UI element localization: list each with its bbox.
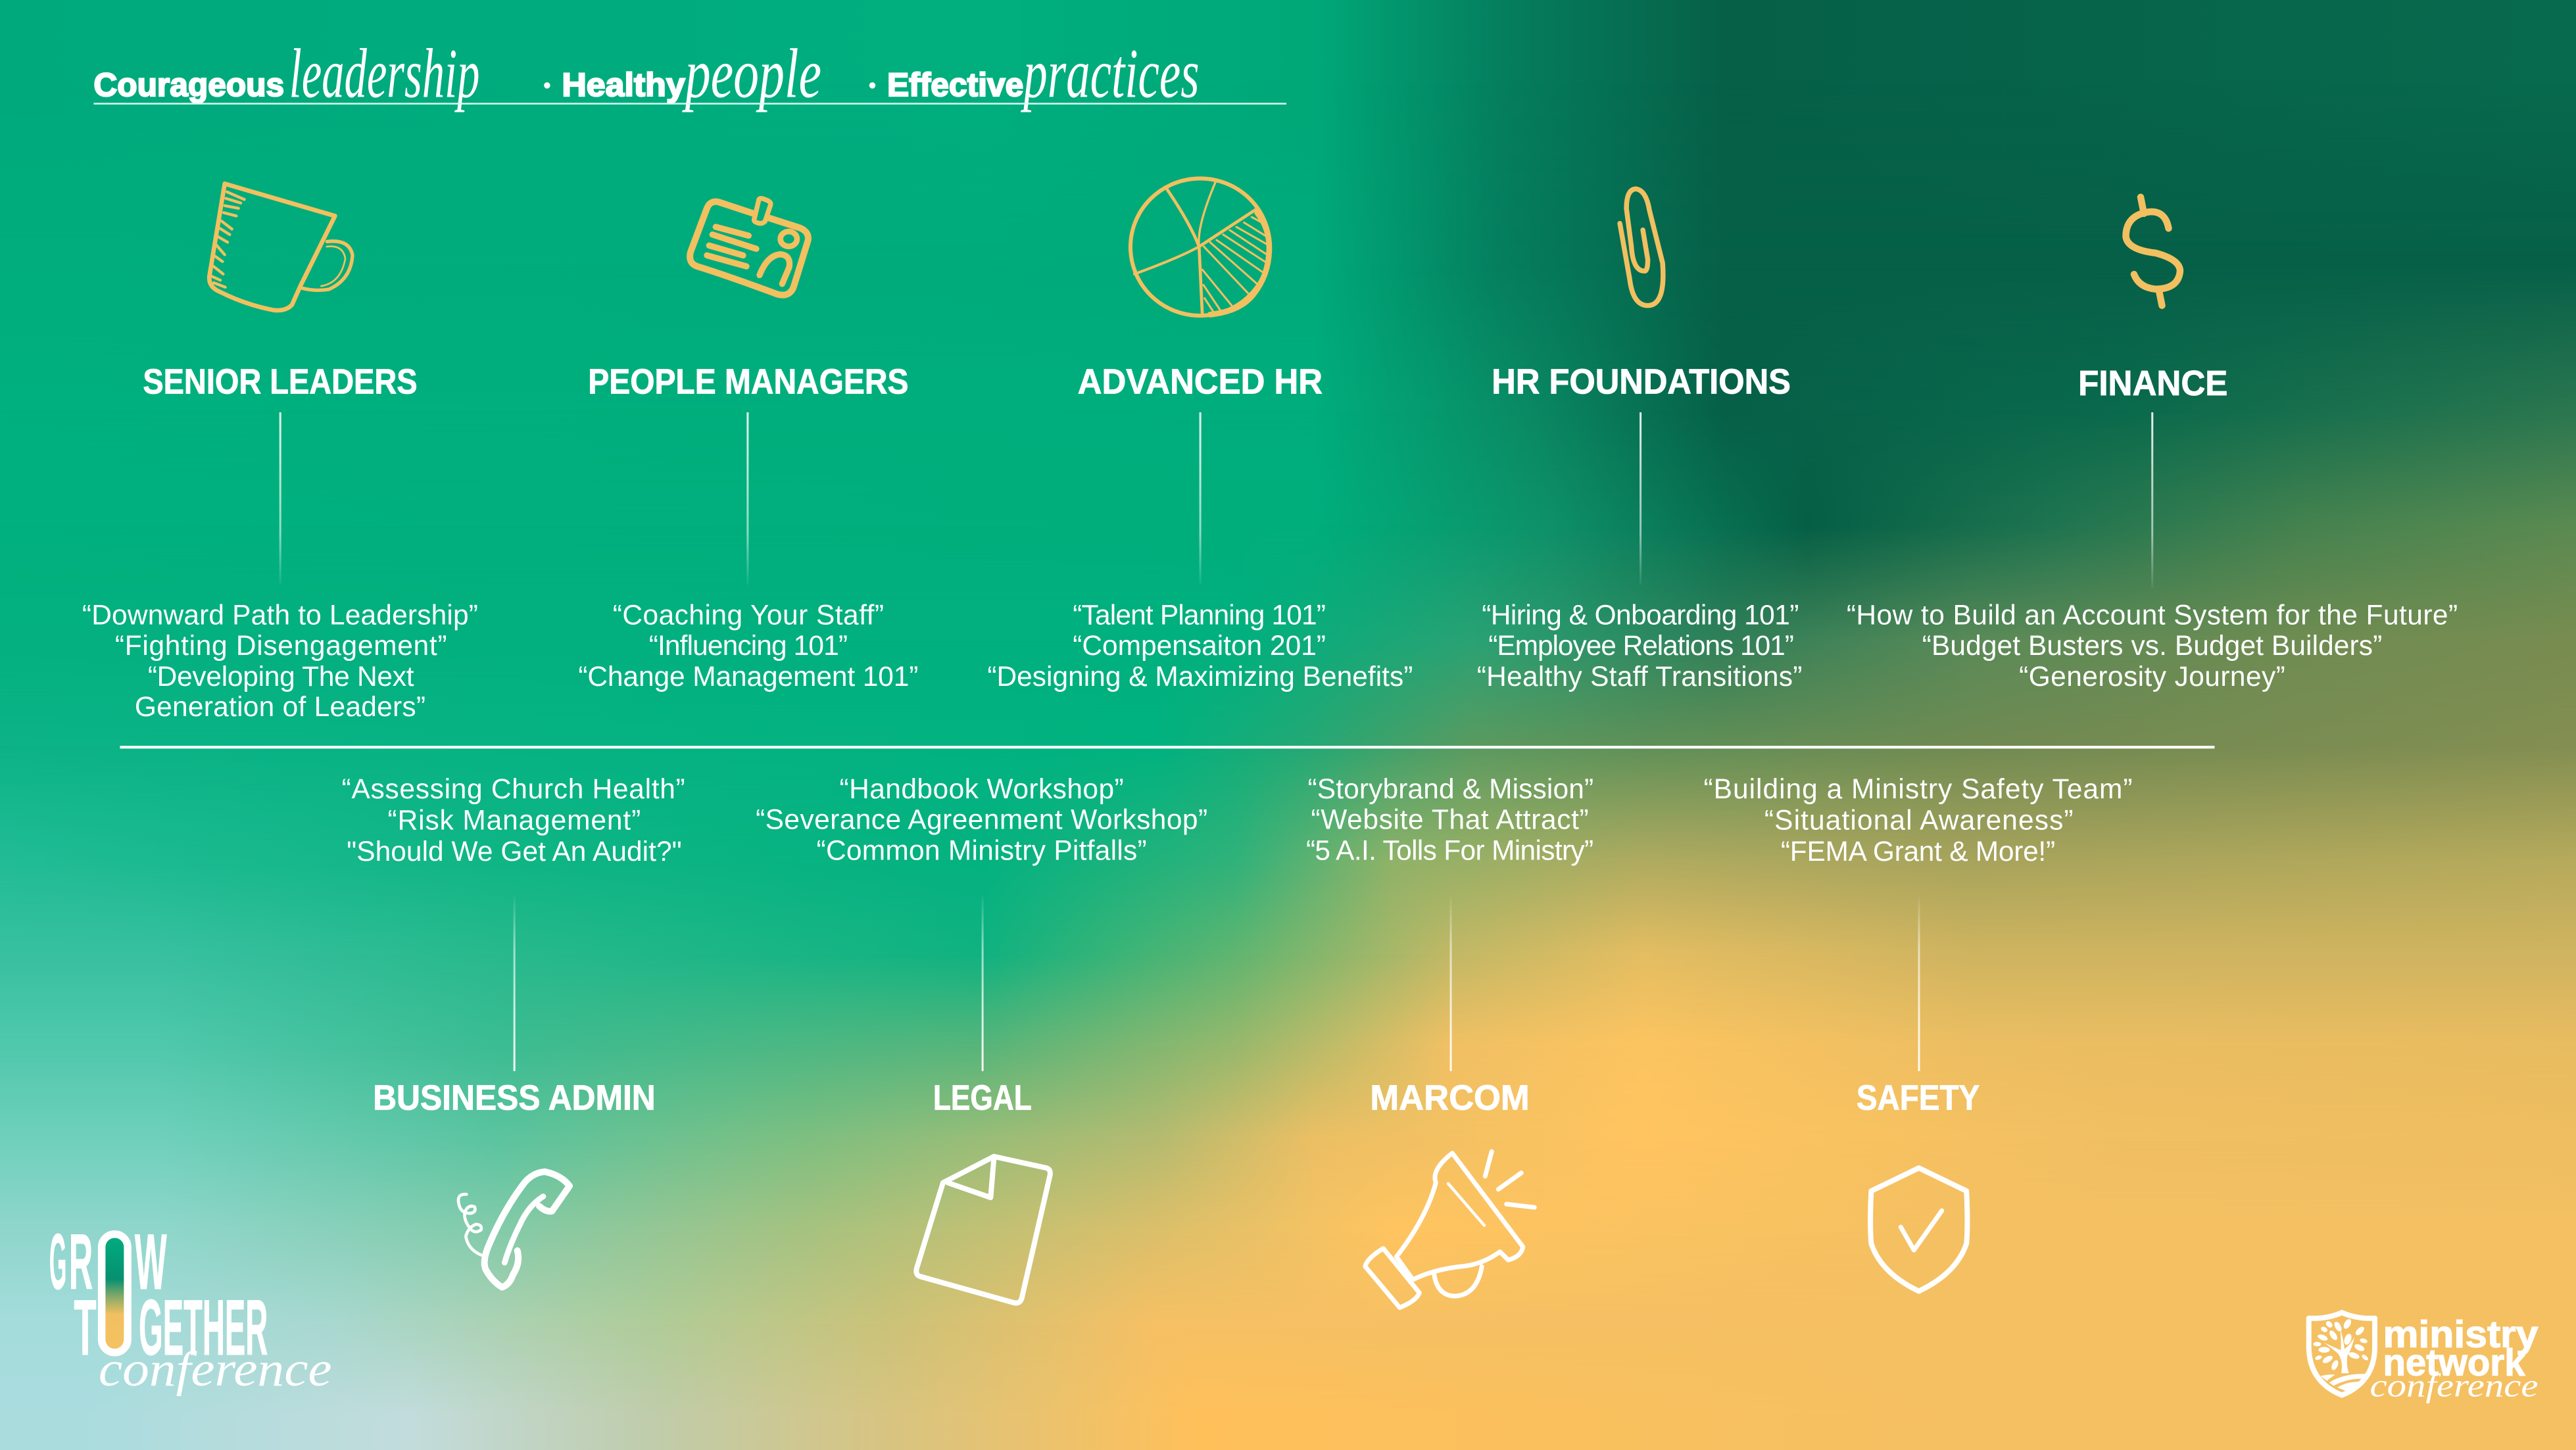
icon: document: [916, 1157, 1050, 1303]
sessions: advanced hr: “Designing & Maximizing Benefits”: [987, 661, 1413, 692]
sessions: legal: “Common Ministry Pitfalls”: [817, 835, 1147, 866]
icon: megaphone: [1365, 1151, 1534, 1307]
sessions: business admin: “Assessing Church Health”: [342, 773, 685, 804]
sessions: safety: “Situational Awareness”: [1764, 805, 2074, 836]
sessions: senior leaders: “Downward Path to Leadership”: [82, 599, 478, 630]
logo: grow together conference: R: [69, 1218, 93, 1306]
title: tagline: leadership: [289, 34, 479, 112]
sessions: legal: [756, 773, 1207, 866]
sessions: finance: “Budget Busters vs. Budget Builders”: [1922, 630, 2382, 661]
icon: shield with check: [1870, 1168, 1967, 1291]
sessions: finance: “Generosity Journey”: [2019, 661, 2285, 692]
heading: senior leaders: SENIOR LEADERS: [143, 362, 418, 401]
logo: grow together conference: G: [49, 1218, 66, 1306]
logo: grow together conference: [49, 1218, 332, 1397]
sessions: people managers: [578, 599, 918, 692]
sessions: marcom: “Website That Attract”: [1311, 804, 1589, 834]
sessions: business admin: “Risk Management”: [388, 805, 641, 836]
sessions: business admin: "Should We Get An Audit?": [347, 836, 682, 867]
sessions: people managers: “Change Management 101”: [578, 661, 918, 692]
sessions: senior leaders: [82, 599, 478, 722]
logo: ministry network conference: ministry: [2383, 1313, 2539, 1355]
sessions: business admin: [342, 773, 685, 867]
icon: id badge: [690, 199, 808, 295]
panel: people managers: [578, 199, 918, 692]
icon: pie chart: [1130, 178, 1270, 316]
sessions: hr foundations: “Employee Relations 101”: [1488, 630, 1794, 661]
sessions: people managers: “Influencing 101”: [649, 630, 848, 661]
panel: legal: [756, 773, 1207, 1303]
logo: grow together conference: GETHER: [139, 1284, 268, 1372]
heading: legal: LEGAL: [933, 1078, 1032, 1117]
icon: paperclip: [1620, 189, 1663, 306]
logo: ministry network conference: network: [2383, 1342, 2525, 1384]
sessions: legal: “Handbook Workshop”: [840, 773, 1124, 804]
heading: marcom: MARCOM: [1370, 1078, 1530, 1117]
sessions: hr foundations: “Healthy Staff Transitions”: [1477, 661, 1802, 692]
sessions: marcom: “Storybrand & Mission”: [1307, 773, 1593, 804]
sessions: hr foundations: [1477, 599, 1802, 692]
sessions: finance: [1847, 599, 2458, 692]
sessions: finance: “How to Build an Account System for the Future”: [1847, 599, 2458, 630]
icon: telephone: [458, 1172, 570, 1287]
panel: business admin: [342, 773, 685, 1287]
icon: mug: [209, 183, 352, 310]
sessions: hr foundations: “Hiring & Onboarding 101”: [1482, 599, 1799, 630]
panel: hr foundations: [1477, 189, 1802, 692]
sessions: safety: “Building a Ministry Safety Team”: [1704, 773, 2133, 804]
logo: ministry network conference: [2309, 1313, 2539, 1403]
logo: grow together conference: W: [135, 1218, 167, 1306]
panel: marcom: [1306, 773, 1593, 1307]
heading: finance: FINANCE: [2078, 364, 2227, 403]
logo: grow together conference: T: [74, 1284, 97, 1372]
sessions: legal: “Severance Agreenment Workshop”: [756, 804, 1207, 834]
panel: senior leaders: [82, 183, 478, 722]
sessions: marcom: [1306, 773, 1593, 866]
title: tagline: practices: [1021, 34, 1200, 112]
sessions: marcom: “5 A.I. Tolls For Ministry”: [1306, 835, 1593, 866]
sessions: advanced hr: “Compensaiton 201”: [1073, 630, 1326, 661]
sessions: advanced hr: [987, 599, 1413, 692]
sessions: people managers: “Coaching Your Staff”: [613, 599, 884, 630]
heading: hr foundations: HR FOUNDATIONS: [1492, 362, 1791, 401]
sessions: safety: “FEMA Grant & More!”: [1781, 836, 2055, 867]
heading: people managers: PEOPLE MANAGERS: [588, 362, 908, 401]
shield with tree: [2309, 1313, 2375, 1395]
sessions: safety: [1704, 773, 2133, 867]
title: tagline: Effective: [887, 66, 1023, 103]
panel: finance: [1847, 197, 2458, 692]
icon: dollar sign: [2126, 197, 2180, 306]
heading: safety: SAFETY: [1857, 1078, 1980, 1117]
title: tagline: people: [682, 34, 821, 112]
title: tagline: Courageous: [93, 66, 284, 103]
sessions: senior leaders: “Developing The Next: [148, 661, 414, 692]
sessions: senior leaders: “Fighting Disengagement”: [115, 630, 447, 661]
sessions: advanced hr: “Talent Planning 101”: [1073, 599, 1326, 630]
panel: safety: [1704, 773, 2133, 1291]
title: tagline: [93, 34, 1286, 112]
heading: business admin: BUSINESS ADMIN: [373, 1078, 656, 1117]
heading: advanced hr: ADVANCED HR: [1078, 362, 1323, 401]
panel: advanced hr: [987, 178, 1413, 692]
title: tagline: Healthy: [562, 66, 685, 103]
logo: grow together conference: conference: [99, 1342, 332, 1397]
sessions: senior leaders: Generation of Leaders”: [135, 691, 425, 722]
logo: ministry network conference: conference: [2369, 1366, 2539, 1403]
